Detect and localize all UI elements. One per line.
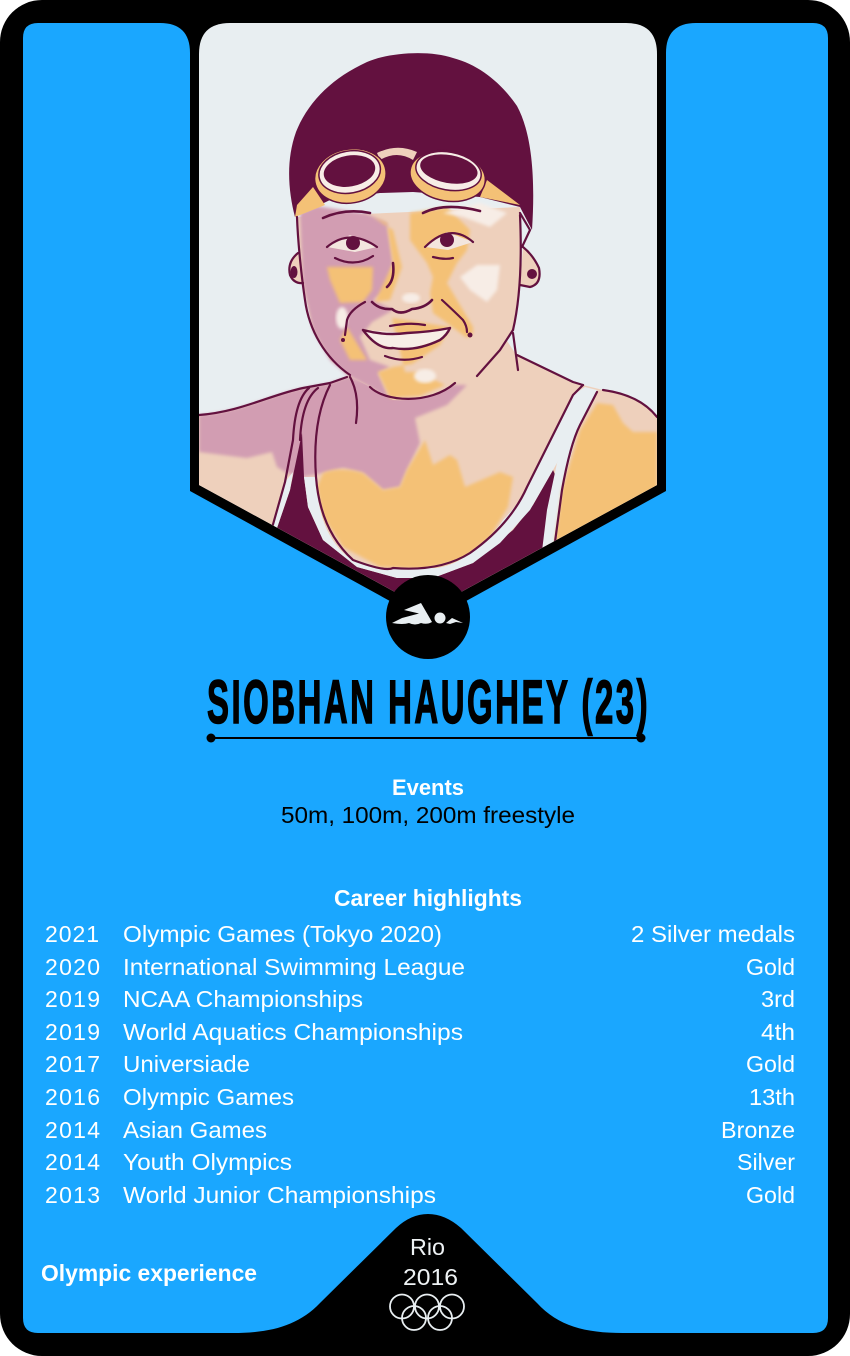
row 2016: 2016	[45, 1084, 100, 1110]
career highlights heading: Career highlights	[334, 885, 522, 911]
row 2020: 2020	[45, 954, 100, 980]
pupils	[290, 233, 537, 342]
row 2019 World: 4th	[761, 1019, 795, 1045]
left cheek highlight	[336, 307, 348, 329]
row 2014 Asian: Bronze	[721, 1117, 795, 1143]
row 2014 Asian: Asian Games	[123, 1117, 267, 1143]
row 2013: Gold	[746, 1182, 795, 1208]
career highlights table	[45, 921, 795, 1208]
right goggle lens	[410, 152, 486, 202]
olympic experience label: Olympic experience	[41, 1260, 257, 1286]
left ear	[290, 254, 302, 282]
row 2017: Universiade	[123, 1051, 250, 1077]
face	[297, 207, 520, 400]
portrait illustration	[199, 23, 657, 620]
row 2020	[45, 954, 795, 980]
row 2014 Youth: 2014	[45, 1149, 100, 1175]
row 2021: 2021	[45, 921, 99, 947]
shoulders and chest	[199, 341, 657, 592]
eye whites	[327, 232, 473, 252]
row 2014 Youth	[45, 1149, 795, 1175]
row 2016: Olympic Games	[123, 1084, 294, 1110]
swimsuit right strap	[542, 396, 594, 548]
drawn ink lines	[199, 207, 657, 569]
row 2019 NCAA: 2019	[45, 986, 100, 1012]
left goggle lens	[315, 149, 386, 204]
forehead highlight	[443, 203, 507, 227]
row 2017: 2017	[45, 1051, 100, 1077]
row 2019 NCAA: NCAA Championships	[123, 986, 363, 1012]
row 2014 Asian	[45, 1117, 795, 1143]
row 2019 World: 2019	[45, 1019, 100, 1045]
left strap white edge	[272, 472, 293, 528]
orange chest shading	[317, 440, 513, 569]
icon badge: swimmer	[386, 575, 470, 659]
row 2014 Asian: 2014	[45, 1117, 100, 1143]
row 2014 Youth: Silver	[737, 1149, 795, 1175]
row 2016	[45, 1084, 795, 1110]
pink face shadow	[300, 206, 393, 400]
row 2020: International Swimming League	[123, 954, 465, 980]
row 2019 NCAA	[45, 986, 795, 1012]
icon: olympic rings	[390, 1294, 464, 1330]
teeth	[366, 330, 448, 348]
swim cap	[289, 53, 533, 230]
right ear	[520, 248, 538, 286]
row 2021	[45, 921, 795, 947]
row 2013	[45, 1182, 795, 1208]
row 2020: Gold	[746, 954, 795, 980]
icon: swimmer head	[434, 612, 446, 624]
orange lip and chin	[378, 318, 450, 398]
row 2016: 13th	[749, 1084, 795, 1110]
swimsuit white neckline	[304, 387, 597, 578]
host city: Rio	[410, 1234, 445, 1260]
row 2019 World	[45, 1019, 795, 1045]
chin highlight	[414, 369, 436, 383]
portrait background	[199, 23, 657, 613]
icon: swimmer body	[392, 603, 432, 624]
row 2021: 2 Silver medals	[631, 921, 795, 947]
row 2017	[45, 1051, 795, 1077]
orange face shading right	[373, 207, 473, 338]
swimsuit	[277, 433, 555, 592]
row 2017: Gold	[746, 1051, 795, 1077]
orange left jaw	[340, 327, 367, 360]
heading underline	[206, 734, 646, 742]
events label: Events	[392, 775, 464, 800]
cheek highlight	[460, 265, 500, 302]
name heading: SIOBHAN HAUGHEY (23)	[207, 669, 648, 737]
goggle strap	[295, 180, 520, 217]
row 2014 Youth: Youth Olympics	[123, 1149, 292, 1175]
events text: 50m, 100m, 200m freestyle	[281, 802, 575, 828]
goggle bridge	[377, 148, 417, 160]
row 2021: Olympic Games (Tokyo 2020)	[123, 921, 442, 947]
row 2013: World Junior Championships	[123, 1182, 436, 1208]
nose highlight	[402, 293, 420, 303]
pink shadow on shoulder and neck	[199, 377, 467, 490]
orange right shoulder	[555, 403, 657, 542]
row 2013: 2013	[45, 1182, 100, 1208]
row 2019 World: World Aquatics Championships	[123, 1019, 463, 1045]
icon: water wave	[446, 618, 463, 624]
row 2019 NCAA: 3rd	[761, 986, 795, 1012]
host year: 2016	[403, 1264, 458, 1290]
orange left cheek	[327, 267, 373, 303]
